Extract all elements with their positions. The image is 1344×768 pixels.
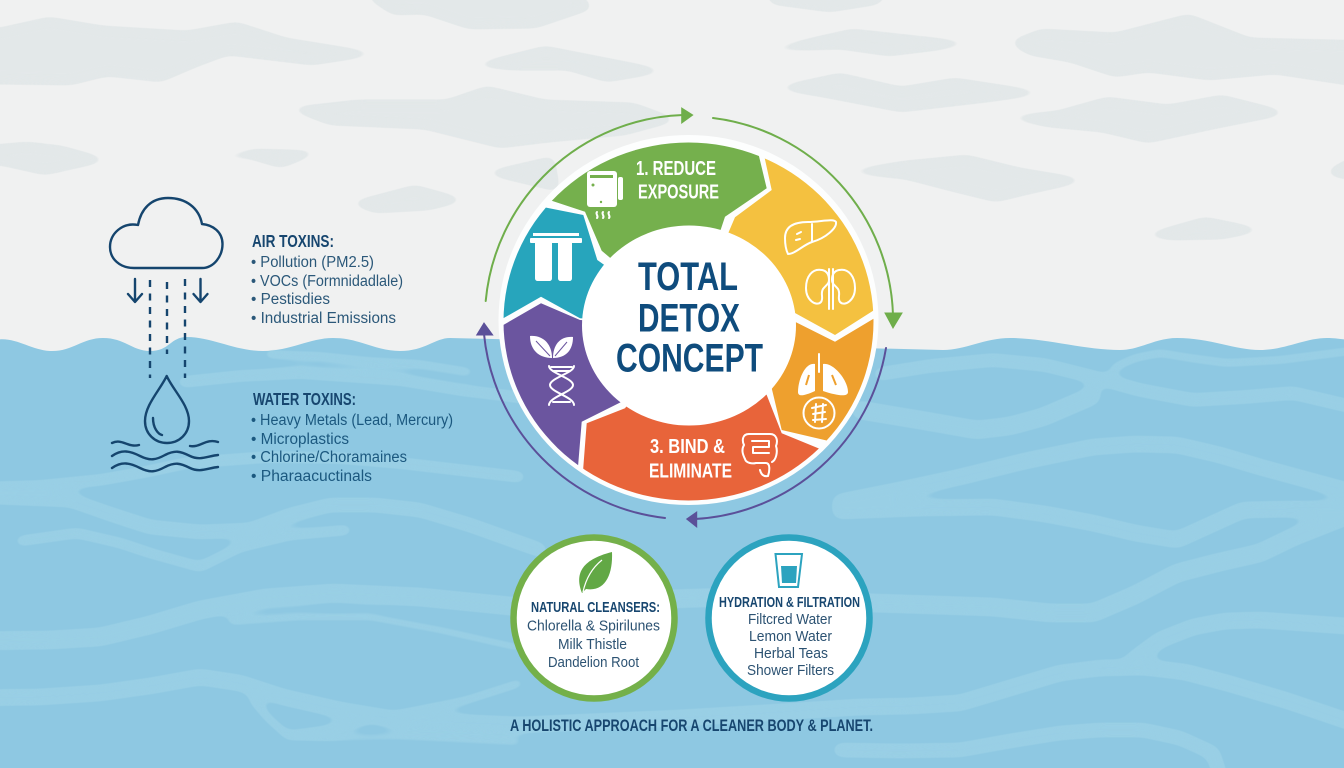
panel: hydration and filtration: Shower Filters (747, 662, 834, 679)
segment: purple plant and dna (504, 303, 620, 466)
icon: cloud with toxin rain (110, 198, 222, 378)
text block: air toxins: • Industrial Emissions (251, 310, 396, 327)
segment: 1 reduce exposure: 1. REDUCE (636, 157, 716, 180)
icon: glass of water (776, 554, 802, 587)
background: water (0, 337, 1344, 768)
title: total detox concept: CONCEPT (616, 336, 763, 380)
icon: lungs (798, 354, 848, 428)
text block: air toxins: • Pestisdies (251, 291, 330, 308)
panel: natural cleansers: Milk Thistle (558, 636, 627, 653)
text block: air toxins: • Pollution (PM2.5) (251, 254, 374, 271)
text block: water toxins: • Pharaacuctinals (251, 468, 372, 485)
segment: 3 bind and eliminate: 3. BIND & (650, 435, 725, 458)
text block: water toxins (251, 389, 453, 485)
panel: natural cleansers: Chlorella & Spirilunes (527, 618, 660, 634)
icon: leaf (579, 552, 612, 593)
text block: air toxins: AIR TOXINS: (252, 231, 334, 251)
icon: water drop with waves (112, 376, 218, 471)
icon: kidneys (806, 269, 855, 309)
text block: air toxins: • VOCs (Formnidadlale) (251, 273, 403, 290)
tagline: A HOLISTIC APPROACH FOR A CLEANER BODY & PLANET. (510, 716, 873, 735)
text block: water toxins: • Chlorine/Choramaines (251, 449, 407, 466)
icon: water filter (530, 233, 582, 281)
icon: air purifier (587, 171, 623, 218)
panel: hydration and filtration: Filtcred Water (748, 611, 832, 628)
panel: natural cleansers: Dandelion Root (548, 654, 640, 671)
panel: hydration and filtration: Herbal Teas (754, 645, 828, 662)
icon: liver (785, 220, 836, 254)
panel: natural cleansers: NATURAL CLEANSERS: (531, 599, 660, 616)
icon: intestine (742, 434, 777, 476)
panel: natural cleansers (514, 538, 674, 698)
text block: water toxins: • Microplastics (251, 431, 349, 448)
center circle (582, 226, 796, 426)
background: sky with clouds (0, 0, 1344, 400)
cycle arrows around wheel (477, 108, 902, 527)
segment: orange lungs (772, 318, 874, 440)
segment: 1 reduce exposure (552, 142, 767, 258)
segment: 3 bind and eliminate (583, 394, 819, 500)
panel: hydration and filtration: Lemon Water (749, 628, 832, 645)
segment: 3 bind and eliminate: ELIMINATE (649, 460, 732, 482)
panel: hydration and filtration (708, 538, 870, 698)
segment: yellow liver and kidneys (728, 158, 874, 335)
title: total detox concept: TOTAL (638, 255, 738, 299)
text block: water toxins: WATER TOXINS: (253, 389, 356, 409)
text block: air toxins (251, 231, 403, 327)
title: total detox concept (616, 255, 763, 380)
title: total detox concept: DETOX (638, 296, 740, 340)
segment: teal water filter (504, 208, 604, 318)
text block: water toxins: • Heavy Metals (Lead, Mercury) (251, 412, 453, 429)
segment: 1 reduce exposure: EXPOSURE (638, 180, 719, 204)
icon: plant and dna (530, 336, 574, 405)
wheel: total detox cycle (498, 135, 878, 505)
panel: hydration and filtration: HYDRATION & FILTRATION (719, 594, 860, 611)
